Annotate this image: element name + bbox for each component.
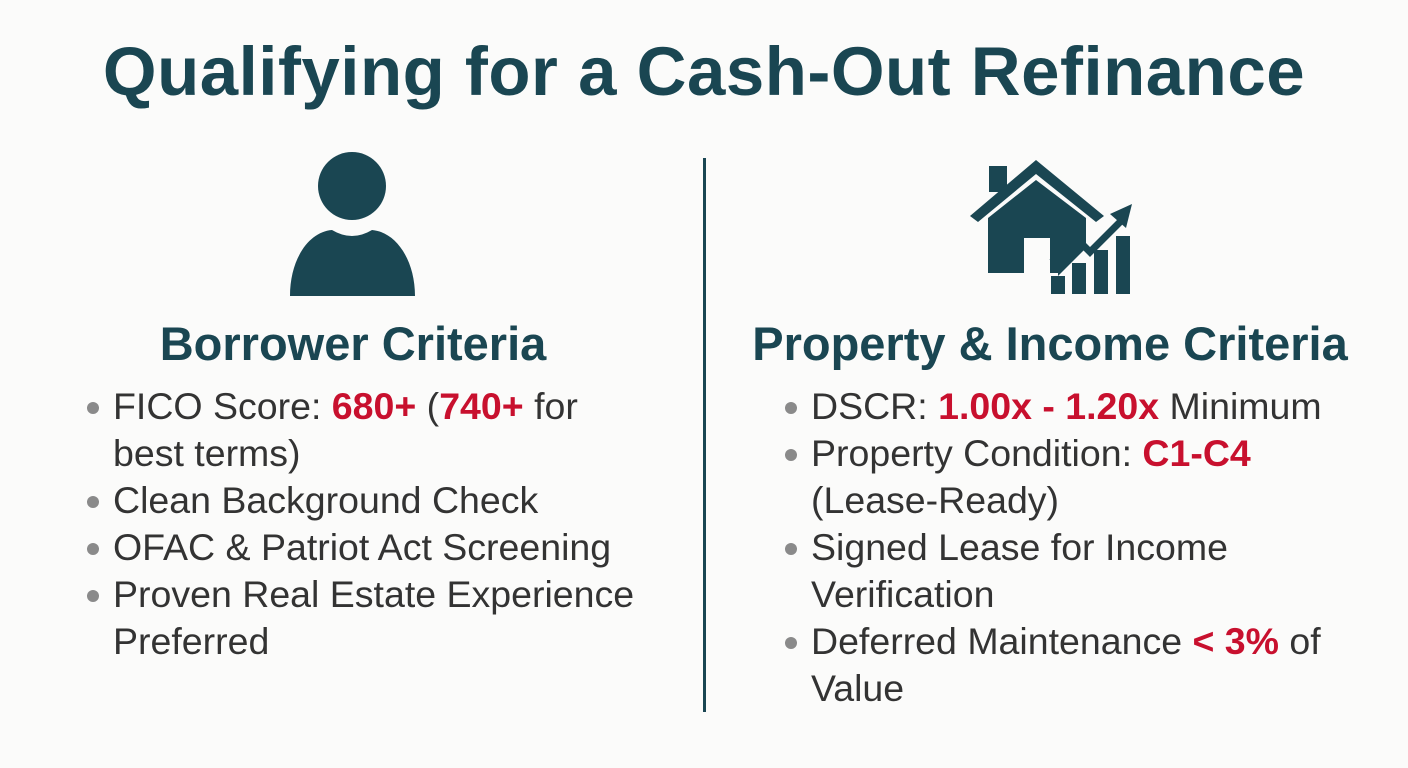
list: borrower: Proven Real Estate Experience xyxy=(113,573,634,615)
list: property: (Lease-Ready) xyxy=(811,479,1059,521)
list: borrower: FICO Score: 680+ (740+ for xyxy=(113,385,578,427)
list: property: Verification xyxy=(811,573,994,615)
list: borrower xyxy=(87,385,634,662)
list: property xyxy=(785,385,1322,709)
icon: person xyxy=(290,152,415,296)
list: property: Value xyxy=(811,667,904,709)
list: borrower: Preferred xyxy=(113,620,269,662)
list: property: Property Condition: C1-C4 xyxy=(811,432,1251,474)
heading: property: Property & Income Criteria xyxy=(752,317,1348,370)
list: borrower: best terms) xyxy=(113,432,301,474)
divider xyxy=(703,158,706,712)
icon: house with chart xyxy=(970,160,1132,294)
heading: borrower: Borrower Criteria xyxy=(160,317,546,370)
list: borrower: OFAC & Patriot Act Screening xyxy=(113,526,611,568)
list: property: DSCR: 1.00x - 1.20x Minimum xyxy=(811,385,1322,427)
list: property: Signed Lease for Income xyxy=(811,526,1228,568)
list: borrower: Clean Background Check xyxy=(113,479,538,521)
list: property: Deferred Maintenance < 3% of xyxy=(811,620,1321,662)
title: Qualifying for a Cash-Out Refinance xyxy=(103,33,1305,110)
